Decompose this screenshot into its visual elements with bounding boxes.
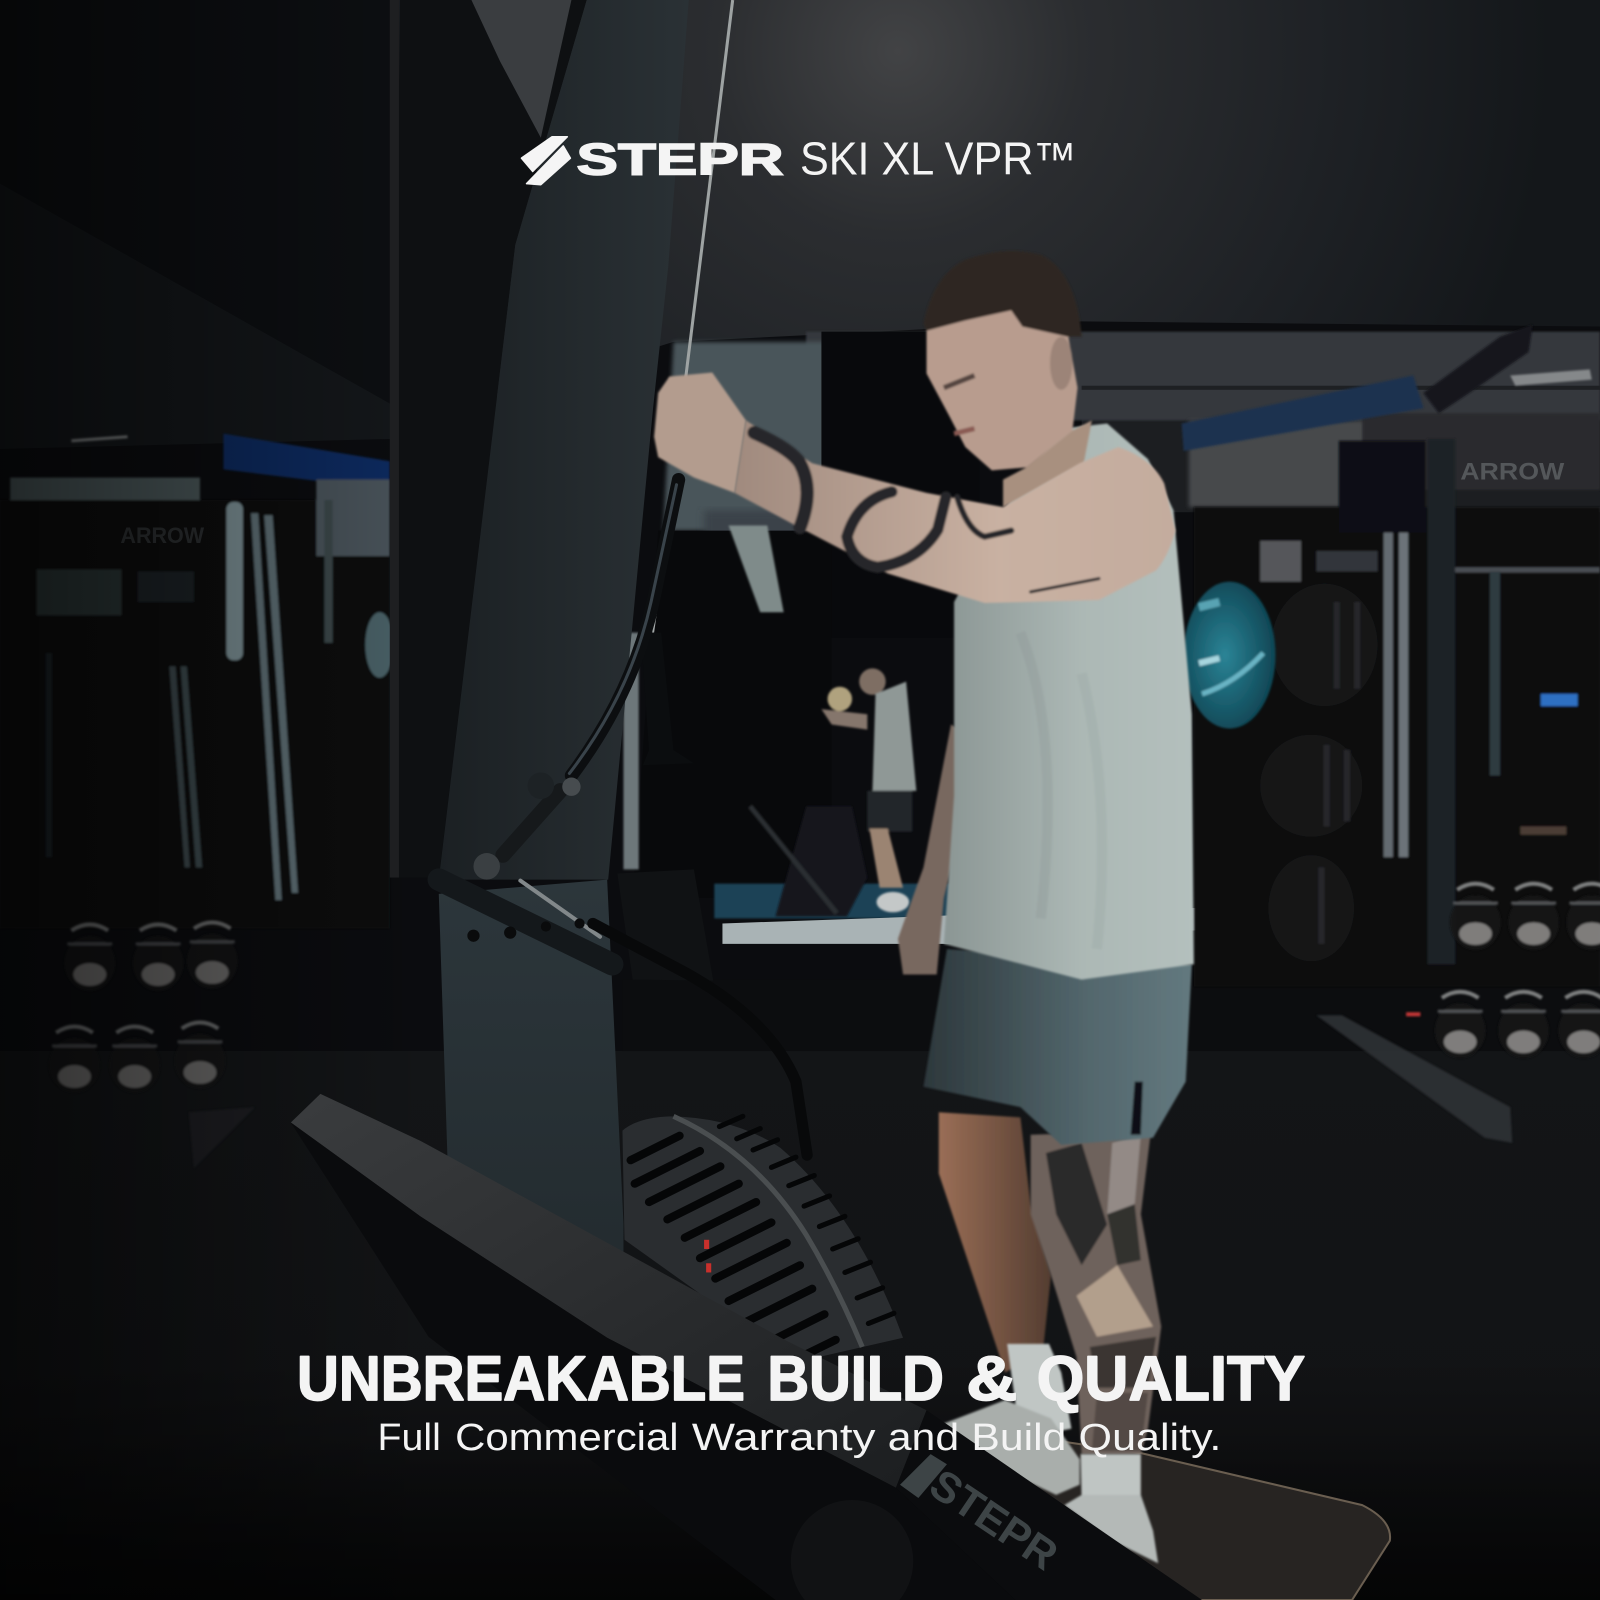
- man: tank top: [944, 423, 1194, 980]
- subheading: Quality.: [1079, 1416, 1221, 1458]
- logo: [521, 133, 784, 185]
- man: hand on handle: [654, 372, 746, 493]
- product name: SKI XL VPR™: [800, 132, 1077, 184]
- man: hanging arm: [898, 724, 969, 974]
- background: right gym rack: [1182, 324, 1600, 987]
- machine: foot platform: [939, 1423, 1390, 1600]
- man: socks and shoes: [931, 1344, 1158, 1563]
- headline: [297, 1344, 1305, 1414]
- STEPR wordmark: STEPR: [577, 133, 784, 184]
- background: mirror with reflection: [623, 332, 1268, 944]
- machine: slanted rail: [291, 1094, 1015, 1600]
- machine: lower body: [439, 880, 623, 1316]
- headline: &: [966, 1344, 1017, 1414]
- machine: handle arm and hose: [439, 480, 807, 1155]
- man: shorts: [923, 949, 1192, 1145]
- man: neck and head: [923, 251, 1092, 507]
- subheading: Build: [971, 1416, 1066, 1458]
- headline: UNBREAKABLE: [297, 1344, 745, 1414]
- background: left kettlebells: [49, 922, 255, 1168]
- machine: flywheel: [622, 1116, 903, 1364]
- subheading: Warranty: [692, 1416, 876, 1458]
- machine: foot rail strip with logo: [896, 1410, 1202, 1600]
- subheading: [378, 1416, 1221, 1458]
- icon: blue exercise ball: [1184, 582, 1276, 729]
- background: right kettlebells: [1316, 884, 1600, 1143]
- machine: hanging grip: [641, 633, 694, 765]
- machine: upper white cover and cable: [471, 0, 733, 633]
- subheading: and: [888, 1416, 959, 1458]
- man: far leg: [939, 1112, 1051, 1372]
- machine: rivets: [467, 918, 585, 942]
- background: left gym rack: [0, 434, 394, 929]
- machine: console display: [617, 869, 713, 981]
- headline: QUALITY: [1037, 1344, 1305, 1414]
- man: near leg with tattoo: [1031, 1131, 1161, 1454]
- icon: STEPR logo mark: [521, 137, 570, 185]
- text: ARROW sign on left rack: ARROW: [120, 523, 205, 548]
- machine: rear wheel: [791, 1500, 913, 1600]
- machine: foot rail strip with logo: STEPR: [921, 1460, 1066, 1580]
- man: raised arm with tattoos: [735, 420, 1176, 603]
- machine: dark rear column: [390, 0, 587, 878]
- machine: main column: [439, 0, 689, 880]
- subheading: Commercial: [455, 1416, 679, 1458]
- subheading: Full: [378, 1416, 441, 1458]
- reflected figure: [750, 668, 916, 916]
- headline: BUILD: [767, 1344, 944, 1414]
- text: ARROW sign on right rack: ARROW: [1460, 459, 1565, 486]
